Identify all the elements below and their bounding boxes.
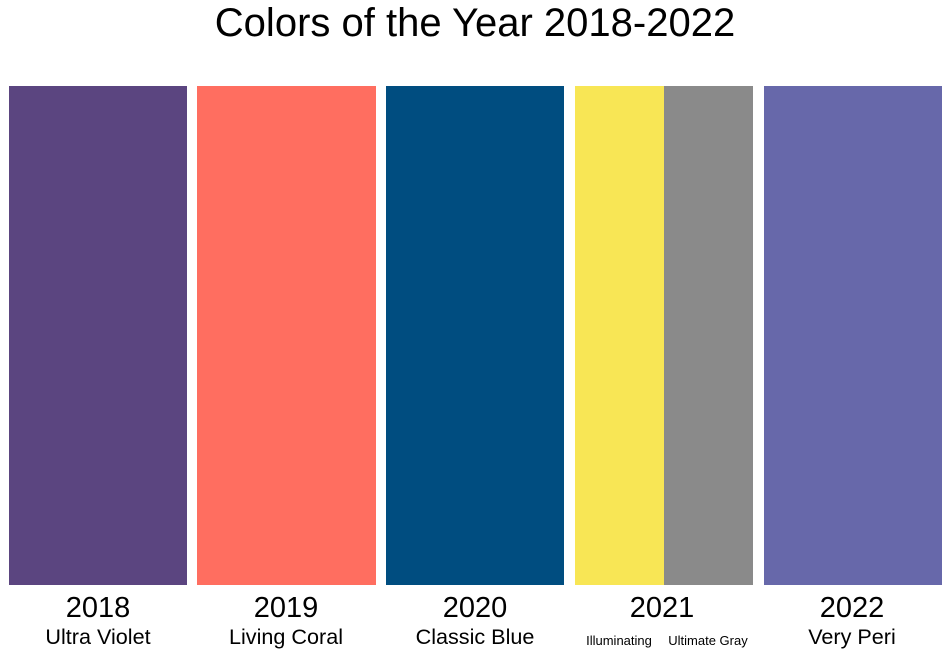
panel: 2022 Very Peri	[764, 86, 942, 649]
year: 2018: 2018	[66, 592, 130, 624]
color name: Ultimate Gray: Ultimate Gray	[668, 633, 748, 648]
swatch: Ultra Violet	[9, 86, 187, 585]
color name: Living Coral: Living Coral	[229, 624, 343, 649]
panel: 2021 Illuminating and Ultimate Gray	[575, 86, 753, 648]
swatch: Living Coral	[197, 86, 376, 585]
title: Colors of the Year 2018-2022	[215, 1, 735, 45]
swatch: Classic Blue	[386, 86, 564, 585]
year: 2022: 2022	[820, 592, 884, 624]
swatch: Ultimate Gray	[664, 86, 753, 585]
color name: Classic Blue: Classic Blue	[416, 624, 534, 649]
swatch: Illuminating	[575, 86, 664, 585]
panel: 2019 Living Coral	[197, 86, 376, 649]
year: 2021: 2021	[630, 592, 694, 624]
color name: Illuminating: Illuminating	[586, 633, 652, 648]
color name: Very Peri: Very Peri	[808, 624, 896, 649]
color name: Ultra Violet: Ultra Violet	[45, 624, 151, 649]
panel: 2020 Classic Blue	[386, 86, 564, 649]
panel: 2018 Ultra Violet	[9, 86, 187, 649]
year: 2019: 2019	[254, 592, 318, 624]
year: 2020: 2020	[443, 592, 507, 624]
swatch: Very Peri	[764, 86, 942, 585]
